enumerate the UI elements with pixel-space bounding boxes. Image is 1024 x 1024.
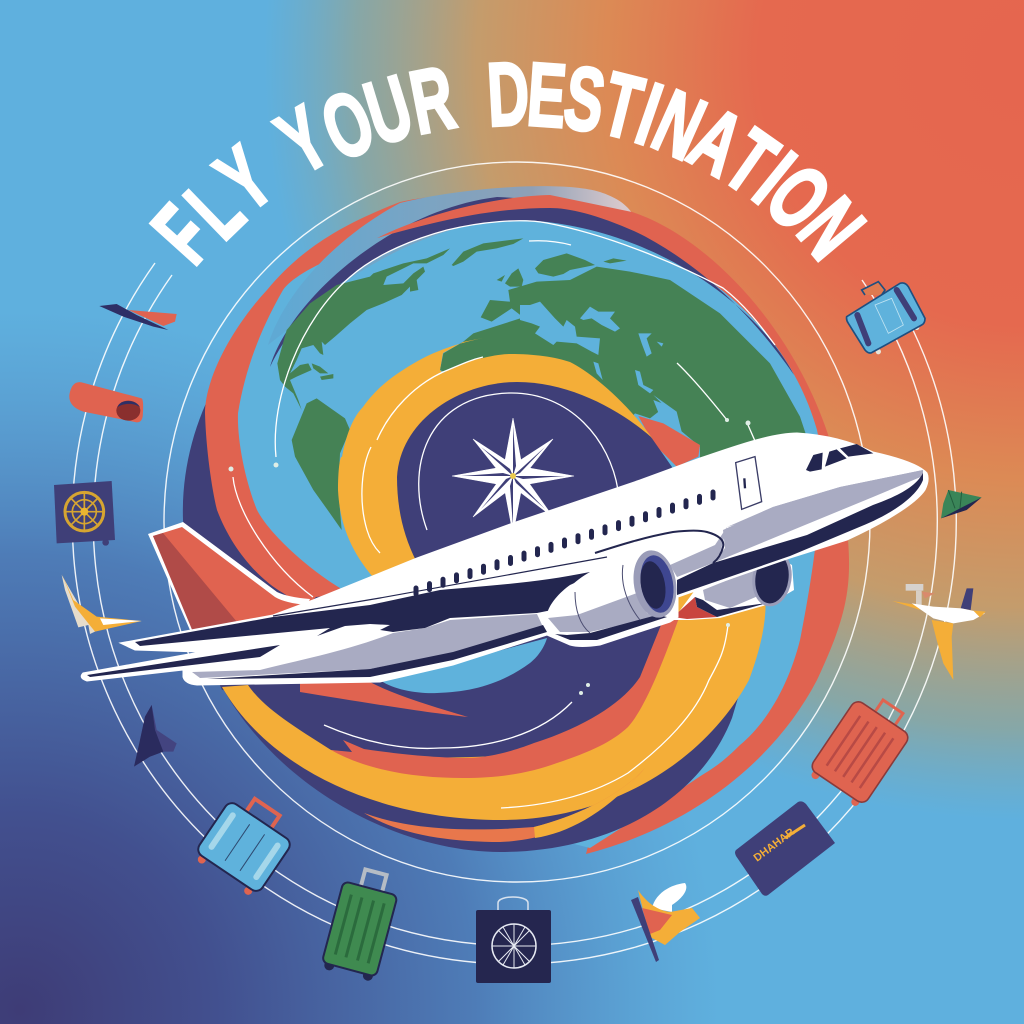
title: D [485, 44, 532, 146]
title: I [736, 135, 812, 222]
title [134, 44, 882, 282]
title: O [309, 71, 388, 181]
yellow inner swirl [338, 338, 652, 610]
title: N [779, 181, 882, 277]
airplane [81, 433, 928, 685]
ireland [497, 275, 505, 282]
greenland [452, 238, 523, 266]
red outer swirl [205, 194, 849, 854]
icon: passport bottom right [735, 801, 835, 896]
icon: flag with wing [631, 883, 700, 962]
tail fin outline [148, 522, 310, 653]
engine body [547, 552, 665, 635]
door [736, 457, 762, 509]
navy crescent [270, 197, 794, 375]
title: U [354, 57, 423, 165]
passenger windows [416, 492, 713, 594]
icon: green suitcase [320, 865, 402, 983]
stabiliser [87, 645, 280, 677]
lower navy stripe [207, 625, 547, 679]
rear engine body [703, 570, 772, 608]
cuba [312, 363, 328, 373]
engine seams [575, 565, 640, 633]
engine shadow [548, 593, 657, 632]
icon: red suitcase [806, 687, 919, 810]
icon: yellow wing [62, 573, 142, 634]
icon: compass star [452, 418, 574, 534]
title: S [558, 48, 611, 153]
eurasia and africa [440, 267, 807, 463]
title: T [707, 112, 793, 214]
title: E [524, 45, 569, 147]
front engine [547, 547, 682, 640]
blue sliver below plane [380, 638, 547, 693]
red wedge [638, 416, 700, 467]
title: N [639, 72, 718, 180]
rear engine intake [750, 549, 794, 607]
wing leading edge [273, 557, 607, 616]
icon: navy bag [476, 897, 551, 983]
engine intake [628, 547, 682, 621]
icon: passport bottom right: DHAHAR [752, 826, 797, 864]
title: I [625, 65, 673, 165]
red pylon [673, 597, 717, 619]
pale top band [268, 186, 632, 345]
tail fin shadow [153, 533, 237, 632]
british isles [505, 268, 523, 287]
scandinavia [535, 253, 595, 277]
title: T [593, 54, 651, 160]
arctic islands [603, 258, 627, 263]
icon: red tube [69, 382, 143, 422]
icon: green umbrella [941, 490, 982, 518]
navy compass disc [397, 382, 672, 610]
icon: passport left [54, 481, 115, 546]
lower yellow swirl [222, 590, 766, 820]
wing root fairing [595, 530, 723, 563]
rear engine outline [673, 555, 794, 620]
south america [292, 398, 350, 530]
title: O [747, 147, 849, 250]
globe and colour swirl [183, 186, 849, 854]
icon: wing top left [99, 304, 177, 330]
continents [277, 238, 807, 530]
icon: navy hat [134, 705, 177, 767]
bottom streak [364, 768, 645, 842]
cockpit windows [806, 444, 873, 472]
north america [277, 248, 450, 410]
tail fin [153, 527, 307, 650]
icon: top right blue suitcase [847, 282, 925, 354]
fuselage grey belly fill [713, 470, 923, 563]
rear engine underside [695, 597, 767, 617]
title: Y [262, 88, 345, 194]
orbit rings [72, 162, 956, 964]
lower navy swirl [222, 560, 770, 852]
lower red swirl [331, 615, 680, 778]
icon: small plane right [892, 584, 986, 680]
hispaniola [320, 374, 333, 380]
back navy crescent [183, 290, 400, 700]
title: R [403, 48, 463, 154]
lower grey body [192, 614, 543, 678]
title: Y [199, 128, 291, 231]
title: L [168, 161, 263, 258]
title: A [674, 89, 759, 197]
white swirl lines [233, 221, 775, 808]
upper wing [135, 572, 590, 646]
icon: blue suitcase [191, 788, 301, 900]
fuselage and wing silhouette [81, 433, 928, 685]
inland seas [520, 302, 682, 432]
fuselage belly navy [677, 473, 923, 595]
red top band [377, 195, 645, 238]
swirl line dots [228, 418, 750, 695]
bottom streak gold end [534, 768, 645, 838]
engine underside [555, 615, 667, 640]
title: F [134, 189, 232, 282]
fuselage grey belly [670, 470, 923, 577]
light blue globe [238, 220, 821, 848]
inner red streak [300, 682, 468, 717]
